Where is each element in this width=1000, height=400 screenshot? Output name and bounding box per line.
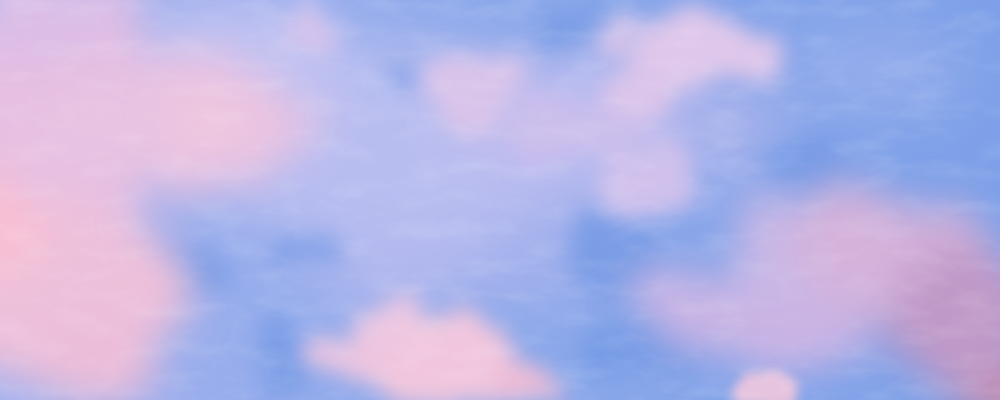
- left cloud bright pink core: [0, 103, 275, 300]
- upper middle clouds: [285, 13, 790, 209]
- left pink cloud mass: [0, 0, 335, 395]
- bottom centre pink cloud: [300, 298, 565, 400]
- right mauve cloud mass: [645, 183, 1000, 400]
- deep blue sky gaps: [153, 0, 855, 395]
- small pink cloud bottom right: [731, 374, 799, 400]
- haze: lavender veil clouds: [130, 0, 970, 310]
